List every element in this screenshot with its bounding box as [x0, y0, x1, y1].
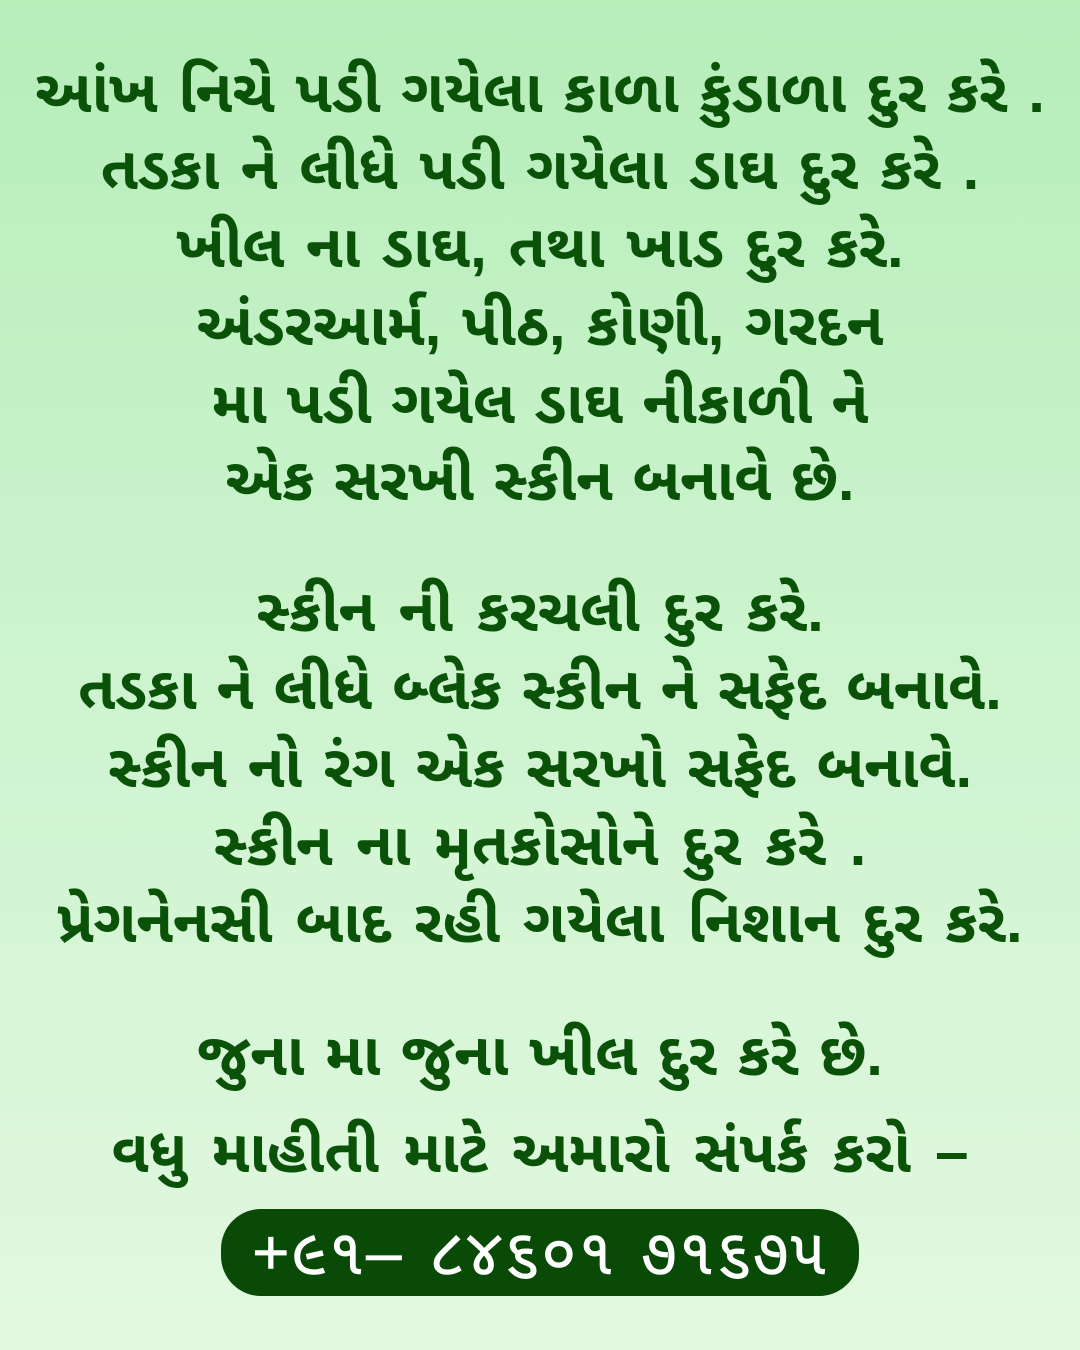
- text block: second benefits: સ્કીન ના મૃતકોસોને દુર કરે .: [214, 811, 866, 878]
- phone number pill: +૯૧– ૮૪૬૦૧ ૭૧૬૭૫: [252, 1216, 828, 1288]
- text block: first benefits: મા પડી ગયેલ ડાઘ નીકાળી ને: [212, 369, 868, 436]
- text block: first benefits: અંડરઆર્મ, પીઠ, કોણી, ગરદન: [197, 291, 883, 358]
- text block: second benefits: તડકા ને લીધે બ્લેક સ્કીન ને સફેદ બનાવે.: [78, 655, 1002, 722]
- text block: first benefits: એક સરખી સ્કીન બનાવે છે.: [225, 446, 855, 513]
- text block: contact prompt: વધુ માહીતી માટે અમારો સંપર્ક કરો –: [111, 1118, 969, 1185]
- text block: acne: જુના મા જુના ખીલ દુર કરે છે.: [197, 1021, 883, 1088]
- text block: second benefits: સ્કીન નો રંગ એક સરખો સફેદ બનાવે.: [108, 733, 972, 800]
- text block: first benefits: [35, 58, 1045, 513]
- text block: first benefits: ખીલ ના ડાઘ, તથા ખાડ દુર કરે.: [176, 213, 904, 280]
- text block: first benefits: તડકા ને લીધે પડી ગયેલા ડાઘ દુર કરે .: [101, 135, 979, 202]
- text block: second benefits: પ્રેગનેનસી બાદ રહી ગયેલા નિશાન દુર કરે.: [57, 888, 1023, 955]
- text block: second benefits: [57, 577, 1023, 958]
- text block: second benefits: સ્કીન ની કરચલી દુર કરે.: [256, 577, 824, 644]
- text block: first benefits: આંખ નિચે પડી ગયેલા કાળા કુંડાળા દુર કરે .: [35, 58, 1045, 125]
